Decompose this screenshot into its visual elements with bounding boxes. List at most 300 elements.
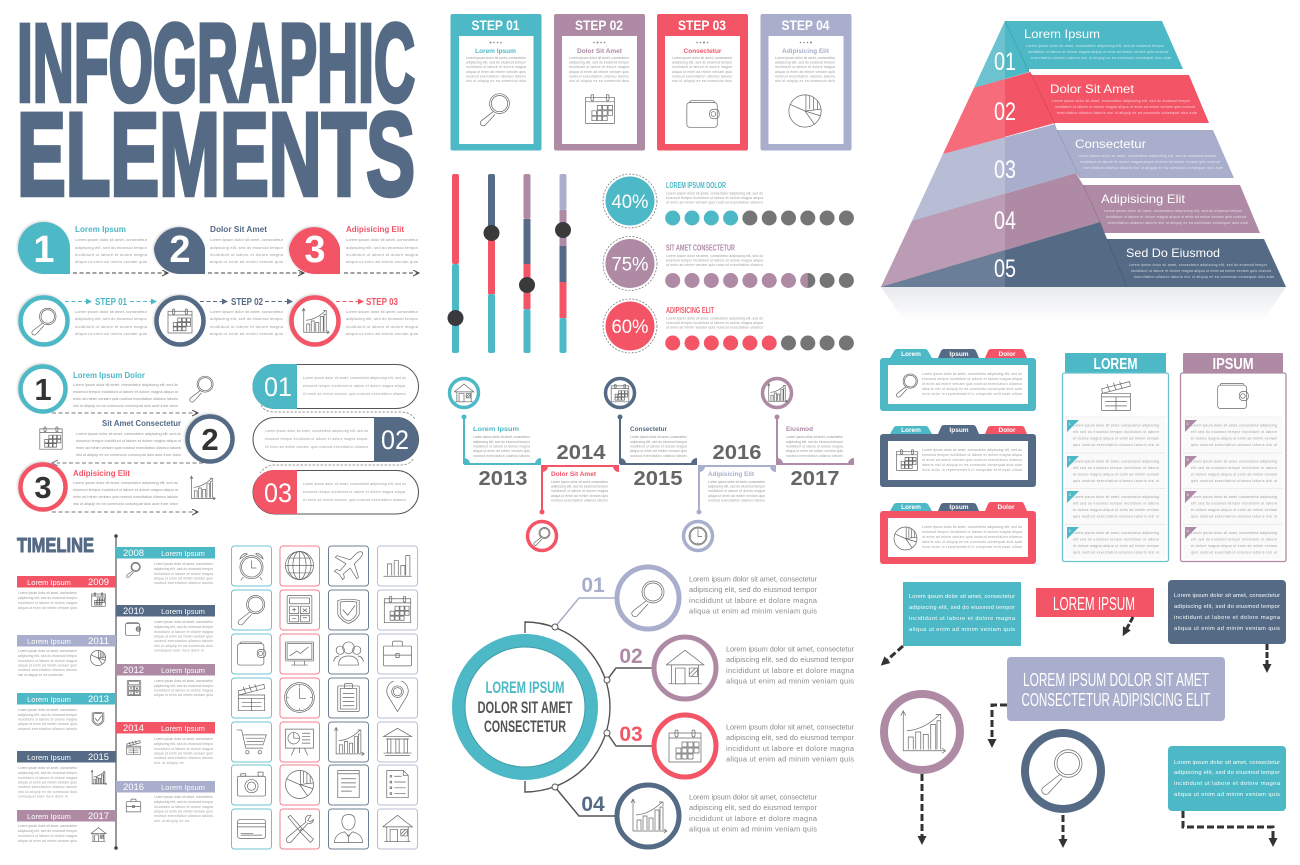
2009: adipiscing elit, sed do eiusmod tempor <box>18 596 78 600</box>
rows: elit sed do eiusmod tempor incididunt ut labore <box>1191 430 1277 434</box>
step texts: incididunt ut labore et dolore magna <box>75 324 148 329</box>
panel: list card Lorem <box>1062 353 1168 562</box>
2017 <box>17 810 116 843</box>
level 03: incididunt ut labore et dolore magna aliqua ut enim ad minim veniam quis nostrud <box>1080 160 1220 164</box>
2012: incididunt ut labore et dolore magna <box>154 688 213 692</box>
step texts: aliqua ut enim ad minim veniam quis <box>210 331 283 336</box>
number circle 1 <box>20 366 66 412</box>
level 01: exercitation ullamco laboris nisi ut aliquip ex ea commodo consequat duis aute <box>1031 56 1171 60</box>
branch 03: aliqua ut enim ad minim veniam quis <box>726 754 854 764</box>
card step 01: Lorem Ipsum <box>475 48 516 55</box>
rows: elit sed do eiusmod tempor incididunt ut labore <box>1191 466 1277 470</box>
level 02: Dolor Sit Amet <box>1050 82 1135 96</box>
step texts: adipiscing elit, sed do eiusmod tempor <box>210 316 284 321</box>
card step 04: Lorem ipsum dolor sit amet, consectetur <box>775 56 836 60</box>
2014 segment: Lorem ipsum dolor sit amet, consectetur <box>551 480 609 484</box>
arrow <box>992 705 1007 741</box>
text block 1: Lorem Ipsum <box>75 224 126 234</box>
text block 2: Lorem ipsum dolor sit amet, consectetur <box>210 237 284 242</box>
slider 2 <box>484 174 500 353</box>
red label: LOREM IPSUM <box>1053 594 1135 614</box>
teal text box 2: Lorem ipsum dolor sit amet, consectetur <box>1174 760 1280 766</box>
number circle 2 <box>188 416 232 462</box>
card step 01: adipiscing elit, sed do eiusmod tempor <box>466 60 527 64</box>
card step 02: Dolor Sit Amet <box>577 48 623 55</box>
step texts: adipiscing elit, sed do eiusmod tempor <box>75 316 148 321</box>
pill 02 <box>253 417 418 462</box>
2014 segment: adipiscing elit, sed do eiusmod tempor <box>551 484 609 488</box>
rows: elit sed do eiusmod tempor incididunt ut labore <box>1191 502 1277 506</box>
branch 03: 03 <box>619 723 643 746</box>
rating 60% <box>603 299 854 353</box>
2011: nisi ut aliquip ex ea commodo <box>18 673 63 677</box>
text block 2: incididunt ut labore et dolore magna <box>210 252 284 257</box>
panel: tabbed cards <box>880 349 1036 564</box>
slate magnifier circle <box>1025 733 1101 809</box>
rows: quis nostrud exercitation ullamco laboris nisi ut <box>1073 479 1159 483</box>
step texts: aliqua ut enim ad minim veniam quis <box>346 331 418 336</box>
rows <box>1185 420 1277 554</box>
2010: adipiscing elit, sed do eiusmod tempor <box>154 625 214 629</box>
card step 04: aliqua ut enim ad minim veniam quis <box>775 70 835 74</box>
rows: et dolore magna aliqua ut enim ad minim veniam <box>1191 508 1277 512</box>
level 04: exercitation ullamco laboris nisi ut aliquip ex ea commodo consequat duis aute <box>1108 221 1248 225</box>
title: ELEMENTS <box>17 89 415 221</box>
level 05 <box>881 222 1286 287</box>
2016 segment <box>684 442 776 550</box>
branch 04: aliqua ut enim ad minim veniam quis <box>689 824 817 834</box>
2009: aliqua ut enim ad minim veniam quis <box>18 606 77 610</box>
text block 3: Lorem ipsum dolor sit amet, consectetur <box>346 237 419 242</box>
branch 02: incididunt ut labore et dolore magna <box>726 666 855 675</box>
card step 02: STEP 02 <box>575 17 623 33</box>
rows <box>1067 420 1159 554</box>
teal text box: adipiscing elit, sed do eiusmod tempor <box>909 605 1015 611</box>
2015: nostrud exercitation ullamco laboris <box>18 785 77 789</box>
card step 04: STEP 04 <box>782 17 830 33</box>
2010: 2010 <box>123 606 144 616</box>
column: red <box>280 546 320 849</box>
pill 01: 01 <box>264 372 292 402</box>
branch 03: adipiscing elit, sed do eiusmod tempor <box>726 733 855 742</box>
2014: incididunt ut labore et dolore magna <box>154 747 213 751</box>
panel: zig-zag numbered list <box>20 366 232 512</box>
2017 segment: adipiscing elit, sed do eiusmod tempor <box>786 440 844 444</box>
2014 segment: aliqua ut enim ad minim veniam quis <box>551 494 608 498</box>
teal text box 2: adipiscing elit, sed do eiusmod tempor <box>1174 770 1280 776</box>
2016: nisi ut aliquip ex ea <box>154 819 189 823</box>
rows: et dolore magna aliqua ut enim ad minim veniam <box>1073 508 1159 512</box>
arrow <box>1266 644 1268 666</box>
step labels: STEP 01 <box>95 297 127 308</box>
2011 <box>17 635 116 677</box>
rating 40%: Lorem ipsum dolor sit amet, consectetur adipiscing elit, sed do <box>666 192 763 196</box>
rows: 4 <box>1068 528 1072 533</box>
slate text box <box>1168 580 1286 644</box>
central ring: DOLOR SIT AMET <box>478 698 573 717</box>
card step 02: Lorem ipsum dolor sit amet, consectetur <box>569 56 630 60</box>
slate text box: adipiscing elit, sed do eiusmod tempor <box>1174 604 1280 610</box>
tab card 3 <box>880 502 1036 564</box>
branch 01: incididunt ut labore et dolore magna <box>689 596 818 605</box>
branch 02: aliqua ut enim ad minim veniam quis <box>726 676 854 686</box>
2010: Lorem ipsum dolor sit amet, consectetur <box>154 620 214 624</box>
item text 1: Lorem ipsum dolor sit amet, consectetur adipiscing elit, sed do <box>73 382 179 387</box>
2017: 2017 <box>88 811 109 821</box>
text block 3 <box>346 224 419 264</box>
2012: 2012 <box>123 665 144 675</box>
2013: 2013 <box>88 694 109 704</box>
panel: horizontal timeline <box>450 378 854 550</box>
2016: Lorem ipsum dolor sit amet, consectetur <box>154 795 214 799</box>
text block 1 <box>75 224 148 264</box>
step labels: STEP 03 <box>366 297 398 308</box>
2013 segment: incididunt ut labore et dolore magna <box>473 444 530 448</box>
2014 segment: Dolor Sit Amet <box>551 471 597 478</box>
connector arrows <box>52 413 203 512</box>
teal text box: aliqua ut enim ad minim veniam quis <box>909 627 1015 633</box>
2016 segment: Adipisicing Elit <box>708 471 755 478</box>
branch 02: 02 <box>619 645 643 668</box>
rows: 1 <box>1068 421 1072 426</box>
2014: 2014 <box>123 723 144 733</box>
number circle 2: 2 <box>201 422 219 457</box>
2014 segment: 2014 <box>556 442 606 464</box>
slate text box: incididunt ut labore et dolore magna <box>1174 615 1281 621</box>
card step 03: incididunt ut labore et dolore magna <box>672 65 732 69</box>
text block 2: Dolor Sit Amet <box>210 224 267 234</box>
2010 <box>116 605 215 652</box>
level 03: Lorem ipsum dolor sit amet, consectetur adipiscing elit, sed do eiusmod tempor <box>1078 154 1217 158</box>
2008: aliqua ut enim ad minim veniam quis <box>154 576 213 580</box>
rows: et dolore magna aliqua ut enim ad minim veniam <box>1073 436 1159 440</box>
step texts: Lorem ipsum dolor sit amet, consectetur <box>75 309 148 314</box>
2008: nostrud exercitation ullamco laboris <box>154 581 213 585</box>
tab card 3: ut enim ad minim veniam quis nostrud exercitation ullamco <box>922 535 1022 539</box>
pill 01: Ut enim ad minim veniam, quis nostrud exercitation ullamco <box>303 392 406 396</box>
teardrop 3 <box>289 227 340 274</box>
step labels <box>95 297 398 308</box>
panel: percent ratings <box>603 174 854 353</box>
card step 04: nisi ut aliquip ex ea commodo duis <box>775 79 835 83</box>
2016 segment: 2016 <box>712 442 762 464</box>
step texts: Lorem ipsum dolor sit amet, consectetur <box>210 309 284 314</box>
text block 3: aliqua ut enim ad minim veniam quis <box>346 259 418 264</box>
card step 04: nostrud exercitation ullamco laboris <box>775 74 835 78</box>
level 02: 02 <box>994 98 1016 126</box>
icon: chart <box>190 476 215 500</box>
rows: et dolore magna aliqua ut enim ad minim veniam <box>1073 544 1159 548</box>
item text 1 <box>73 370 179 408</box>
card step 01: aliqua ut enim ad minim veniam quis <box>466 70 526 74</box>
tab card 2: irure dolor in reprehenderit in voluptate velit esse cillum <box>922 468 1022 472</box>
branch 04: adipiscing elit, sed do eiusmod tempor <box>689 803 818 812</box>
rows: Lorem ipsum dolor sit amet, consectetur adipiscing <box>1191 495 1277 499</box>
rating 75%: eiusmod tempor incididunt ut labore et dolore magna aliqua <box>666 258 763 262</box>
2015 segment: Consectetur <box>630 426 667 433</box>
item text 2 <box>76 418 182 457</box>
2017 segment: nostrud exercitation ullamco laboris <box>786 454 843 458</box>
panel: pill list <box>252 364 418 514</box>
card step 03: adipiscing elit, sed do eiusmod tempor <box>672 60 733 64</box>
panel: icon grid <box>232 546 418 849</box>
2013: Lorem ipsum dolor sit amet, consectetur <box>18 708 78 712</box>
2014: Lorem ipsum dolor sit amet, consectetur <box>154 737 214 741</box>
level 01 <box>974 21 1183 88</box>
step circle 1 <box>20 298 68 344</box>
2011: aliqua ut enim ad minim veniam quis <box>18 664 77 668</box>
2015 segment: aliqua ut enim ad minim veniam quis <box>630 449 687 453</box>
text block 3: incididunt ut labore et dolore magna <box>346 252 419 257</box>
step circle 3 <box>292 298 338 344</box>
pill 01: eiusmod tempor incididunt ut labore et dolore magna aliqua. <box>303 384 406 388</box>
slate text box: aliqua ut enim ad minim veniam quis <box>1174 626 1280 632</box>
teal text box: Lorem ipsum dolor sit amet, consectetur <box>909 594 1015 600</box>
2009: Lorem ipsum dolor sit amet, consectetur <box>18 591 78 595</box>
tab card 2: Lorem ipsum dolor sit amet, consectetur adipiscing elit, sed do <box>922 448 1022 452</box>
2012 <box>116 664 215 697</box>
level 05: exercitation ullamco laboris nisi ut aliquip ex ea commodo consequat duis aute <box>1134 275 1274 279</box>
branch 03: incididunt ut labore et dolore magna <box>726 744 855 753</box>
card step 01: incididunt ut labore et dolore magna <box>466 65 526 69</box>
lavender heading box: LOREM IPSUM DOLOR SIT AMET <box>1023 670 1209 690</box>
tab card 3: laboris nisi ut aliquip ex ea commodo consequat duis aute <box>922 540 1022 544</box>
pill 01: Lorem ipsum dolor sit amet, consectetur adipiscing elit, sed do <box>303 376 406 380</box>
branch 04: Lorem ipsum dolor sit amet, consectetur <box>689 792 818 802</box>
item text 3: eiusmod tempor incididunt ut labore et dolore magna aliqua ut <box>73 487 179 492</box>
rows: quis nostrud exercitation ullamco laboris nisi ut <box>1073 443 1159 447</box>
2017 segment: incididunt ut labore et dolore magna <box>786 444 843 448</box>
2012: aliqua ut enim ad minim veniam quis <box>154 693 213 697</box>
2015 segment: adipiscing elit, sed do eiusmod tempor <box>630 440 688 444</box>
2016: aliqua ut enim ad minim veniam quis <box>154 810 213 814</box>
rating 75%: 75% <box>612 254 649 276</box>
rows: 1 <box>1186 421 1190 426</box>
rating 60%: ut enim ad minim veniam quis nostrud exercitation ullamco <box>666 326 763 330</box>
teal text box 2: incididunt ut labore et dolore magna <box>1174 781 1281 787</box>
panel: step cards <box>450 14 852 150</box>
rating 75% <box>603 236 854 290</box>
tab card 3: eiusmod tempor incididunt ut labore et dolore magna aliqua <box>922 530 1022 534</box>
number circle 3 <box>20 464 66 510</box>
rows: Lorem ipsum dolor sit amet, consectetur adipiscing <box>1191 460 1277 464</box>
column: slate <box>328 546 368 849</box>
branch 01 <box>552 567 818 630</box>
2011: Lorem ipsum dolor sit amet, consectetur <box>18 649 78 653</box>
step texts: aliqua ut enim ad minim veniam quis <box>75 331 147 336</box>
text block 3: adipiscing elit, sed do eiusmod tempor <box>346 245 419 250</box>
2017 segment: aliqua ut enim ad minim veniam quis <box>786 449 843 453</box>
teardrop 2: 2 <box>169 229 191 271</box>
card step 03: nisi ut aliquip ex ea commodo duis <box>672 79 732 83</box>
item text 2: Sit Amet Consectetur <box>102 418 182 428</box>
card step 01: nostrud exercitation ullamco laboris <box>466 74 526 78</box>
tab card 3: Lorem ipsum dolor sit amet, consectetur adipiscing elit, sed do <box>922 525 1022 529</box>
2012: adipiscing elit, sed do eiusmod tempor <box>154 684 214 688</box>
reflection <box>881 287 1286 322</box>
card step 01: Lorem ipsum dolor sit amet, consectetur <box>466 56 527 60</box>
step circle 2 <box>156 298 204 344</box>
pill 02: eiusmod tempor incididunt ut labore et dolore magna aliqua. <box>265 437 368 441</box>
card step 04: adipiscing elit, sed do eiusmod tempor <box>775 60 836 64</box>
2013 segment: 2013 <box>478 468 528 490</box>
tab card 2: laboris nisi ut aliquip ex ea commodo consequat duis aute <box>922 463 1022 467</box>
rows: quis nostrud exercitation ullamco laboris nisi ut <box>1073 550 1159 554</box>
2010: consequat aute irure dolor in <box>154 648 204 652</box>
tab card 2: Dolor <box>999 427 1016 434</box>
header: LOREM <box>1094 356 1138 373</box>
box <box>1180 373 1286 562</box>
2015 segment: nostrud exercitation ullamco laboris <box>630 454 687 458</box>
rows: elit sed do eiusmod tempor incididunt ut labore <box>1073 430 1159 434</box>
card step 02 <box>554 14 645 150</box>
rows: et dolore magna aliqua ut enim ad minim veniam <box>1073 472 1159 476</box>
2016 segment: Lorem ipsum dolor sit amet, consectetur <box>708 480 766 484</box>
pill 02: Ut enim ad minim veniam, quis nostrud exercitation ullamco <box>265 445 368 449</box>
tab card 3: irure dolor in reprehenderit in voluptate velit esse cillum <box>922 545 1022 549</box>
panel: flow chart <box>884 580 1286 841</box>
2015: aliqua ut enim ad minim veniam quis <box>18 780 77 784</box>
card step 03: aliqua ut enim ad minim veniam quis <box>672 70 732 74</box>
number circle 1: 1 <box>34 372 52 407</box>
pill 03: Lorem ipsum dolor sit amet, consectetur adipiscing elit, sed do <box>303 482 406 486</box>
2016 segment: adipiscing elit, sed do eiusmod tempor <box>708 484 766 488</box>
pill 03: Ut enim ad minim veniam, quis nostrud exercitation ullamco <box>303 498 406 502</box>
rows: Lorem ipsum dolor sit amet, consectetur adipiscing <box>1191 424 1277 428</box>
2015: Lorem ipsum dolor sit amet, consectetur <box>18 766 78 770</box>
header <box>1065 353 1166 373</box>
level 05: Sed Do Eiusmod <box>1126 246 1220 260</box>
2017 segment <box>762 378 854 490</box>
2016: 2016 <box>123 782 144 792</box>
card step 04: incididunt ut labore et dolore magna <box>775 65 835 69</box>
tab card 1: Dolor <box>999 351 1016 358</box>
2014 segment <box>528 442 619 550</box>
step texts: Lorem ipsum dolor sit amet, consectetur <box>346 309 419 314</box>
2014 segment: nostrud exercitation ullamco laboris <box>551 498 608 502</box>
panel: list card Ipsum <box>1180 353 1286 562</box>
card step 04: Adipisicing Elit <box>782 48 830 55</box>
connector arc <box>525 622 610 792</box>
teal text box 2: aliqua ut enim ad minim veniam quis <box>1174 792 1280 798</box>
text block 1: Lorem ipsum dolor sit amet, consectetur <box>75 237 148 242</box>
number circle 3: 3 <box>34 470 52 505</box>
2011: incididunt ut labore et dolore magna <box>18 659 77 663</box>
item text 2: eiusmod tempor incididunt ut labore et dolore magna aliqua ut <box>76 438 182 443</box>
column: lavender <box>378 546 418 849</box>
arrow <box>1183 811 1273 840</box>
level 04: Lorem ipsum dolor sit amet, consectetur adipiscing elit, sed do eiusmod tempor <box>1104 209 1243 213</box>
card step 03 <box>657 14 748 150</box>
2015: nisi ut aliquip ex ea commodo duis <box>18 790 77 794</box>
card step 01: STEP 01 <box>472 17 520 33</box>
rows: 4 <box>1186 528 1190 533</box>
2016 segment: nostrud exercitation ullamco laboris <box>708 498 765 502</box>
2010: incididunt ut labore et dolore magna <box>154 630 213 634</box>
step labels: STEP 02 <box>231 297 263 308</box>
pill 02: Lorem ipsum dolor sit amet, consectetur adipiscing elit, sed do <box>265 429 368 433</box>
rating 60%: ADIPISICING ELIT <box>666 306 714 315</box>
arrow <box>920 774 924 838</box>
2015 segment: 2015 <box>634 468 682 490</box>
2017: incididunt ut labore et dolore magna <box>18 834 77 838</box>
level 04: 04 <box>994 207 1016 235</box>
card step 01: nisi ut aliquip ex ea commodo duis <box>466 79 526 83</box>
rows: Lorem ipsum dolor sit amet, consectetur adipiscing <box>1073 531 1159 535</box>
2015: incididunt ut labore et dolore magna <box>18 776 77 780</box>
title: INFOGRAPHIC <box>17 2 415 125</box>
pill 03: 03 <box>264 478 292 508</box>
card step 02: adipiscing elit, sed do eiusmod tempor <box>569 60 630 64</box>
2010: Lorem Ipsum <box>161 607 205 616</box>
item text 1: nisi ut aliquip ex ea commodo consequat duis aute irure dolor <box>73 403 179 408</box>
tab card 2 <box>880 425 1036 487</box>
2016 segment: aliqua ut enim ad minim veniam quis <box>708 494 765 498</box>
level 03: 03 <box>994 156 1016 184</box>
2013 segment: Lorem ipsum dolor sit amet, consectetur <box>473 435 531 439</box>
2013 segment <box>450 378 541 490</box>
arrow <box>1062 815 1064 841</box>
panel: numbered teardrop steps <box>18 222 419 274</box>
card step 03: STEP 03 <box>678 17 726 33</box>
level 01: 01 <box>994 48 1016 76</box>
2014: aliqua ut enim ad minim veniam quis <box>154 752 213 756</box>
2013 segment: aliqua ut enim ad minim veniam quis <box>473 449 530 453</box>
branch 03: Lorem ipsum dolor sit amet, consectetur <box>726 722 855 732</box>
level 04: incididunt ut labore et dolore magna aliqua ut enim ad minim veniam quis nostrud <box>1106 215 1246 219</box>
level 04 <box>881 173 1260 287</box>
tab card 1: Lorem ipsum dolor sit amet, consectetur adipiscing elit, sed do <box>922 372 1022 376</box>
2014: nostrud exercitation ullamco laboris <box>154 756 213 760</box>
arrows <box>73 272 418 274</box>
rows: Lorem ipsum dolor sit amet, consectetur adipiscing <box>1073 424 1159 428</box>
mauve chart circle <box>884 694 960 770</box>
text block 2: aliqua ut enim ad minim veniam quis <box>210 259 283 264</box>
item text 1: Lorem Ipsum Dolor <box>73 370 146 380</box>
2014: adipiscing elit, sed do eiusmod tempor <box>154 742 214 746</box>
2010: nisi ut aliquip ex ea commodo duis <box>154 644 213 648</box>
2008: incididunt ut labore et dolore magna <box>154 572 213 576</box>
rating 40% <box>603 174 854 228</box>
rows: quis nostrud exercitation ullamco laboris nisi ut <box>1191 443 1277 447</box>
2016: Lorem Ipsum <box>161 783 205 792</box>
rows: Lorem ipsum dolor sit amet, consectetur adipiscing <box>1073 495 1159 499</box>
rows: quis nostrud exercitation ullamco laboris nisi ut <box>1191 550 1277 554</box>
lavender heading box <box>1007 657 1225 721</box>
level 02: exercitation ullamco laboris nisi ut aliquip ex ea commodo consequat duis aute <box>1057 111 1197 115</box>
slider 1 <box>448 174 464 353</box>
2012: Lorem ipsum dolor sit amet, consectetur <box>154 679 214 683</box>
icon: calendar <box>40 427 62 449</box>
item text 3: Adipisicing Elit <box>73 468 130 478</box>
2015: Lorem Ipsum <box>27 753 71 762</box>
branch 01: adipiscing elit, sed do eiusmod tempor <box>689 585 818 594</box>
rows: quis nostrud exercitation ullamco laboris nisi ut <box>1191 479 1277 483</box>
2015: adipiscing elit, sed do eiusmod tempor <box>18 771 78 775</box>
level 03: exercitation ullamco laboris nisi ut aliquip ex ea commodo consequat duis aute <box>1083 166 1223 170</box>
2017: Lorem ipsum dolor sit amet, consectetur <box>18 824 78 828</box>
2016 segment: incididunt ut labore et dolore magna <box>708 489 765 493</box>
slider 4 <box>555 174 571 353</box>
branch 03 <box>604 715 855 777</box>
card step 02: incididunt ut labore et dolore magna <box>569 65 629 69</box>
tab card 1: Ipsum <box>949 351 969 358</box>
text block 1: aliqua ut enim ad minim veniam quis <box>75 259 147 264</box>
2015: consequat aute irure dolor in <box>18 794 68 798</box>
teal text box 2 <box>1168 746 1286 811</box>
2017 segment: Eiusmod <box>786 426 813 433</box>
rows: 2 <box>1068 457 1072 462</box>
